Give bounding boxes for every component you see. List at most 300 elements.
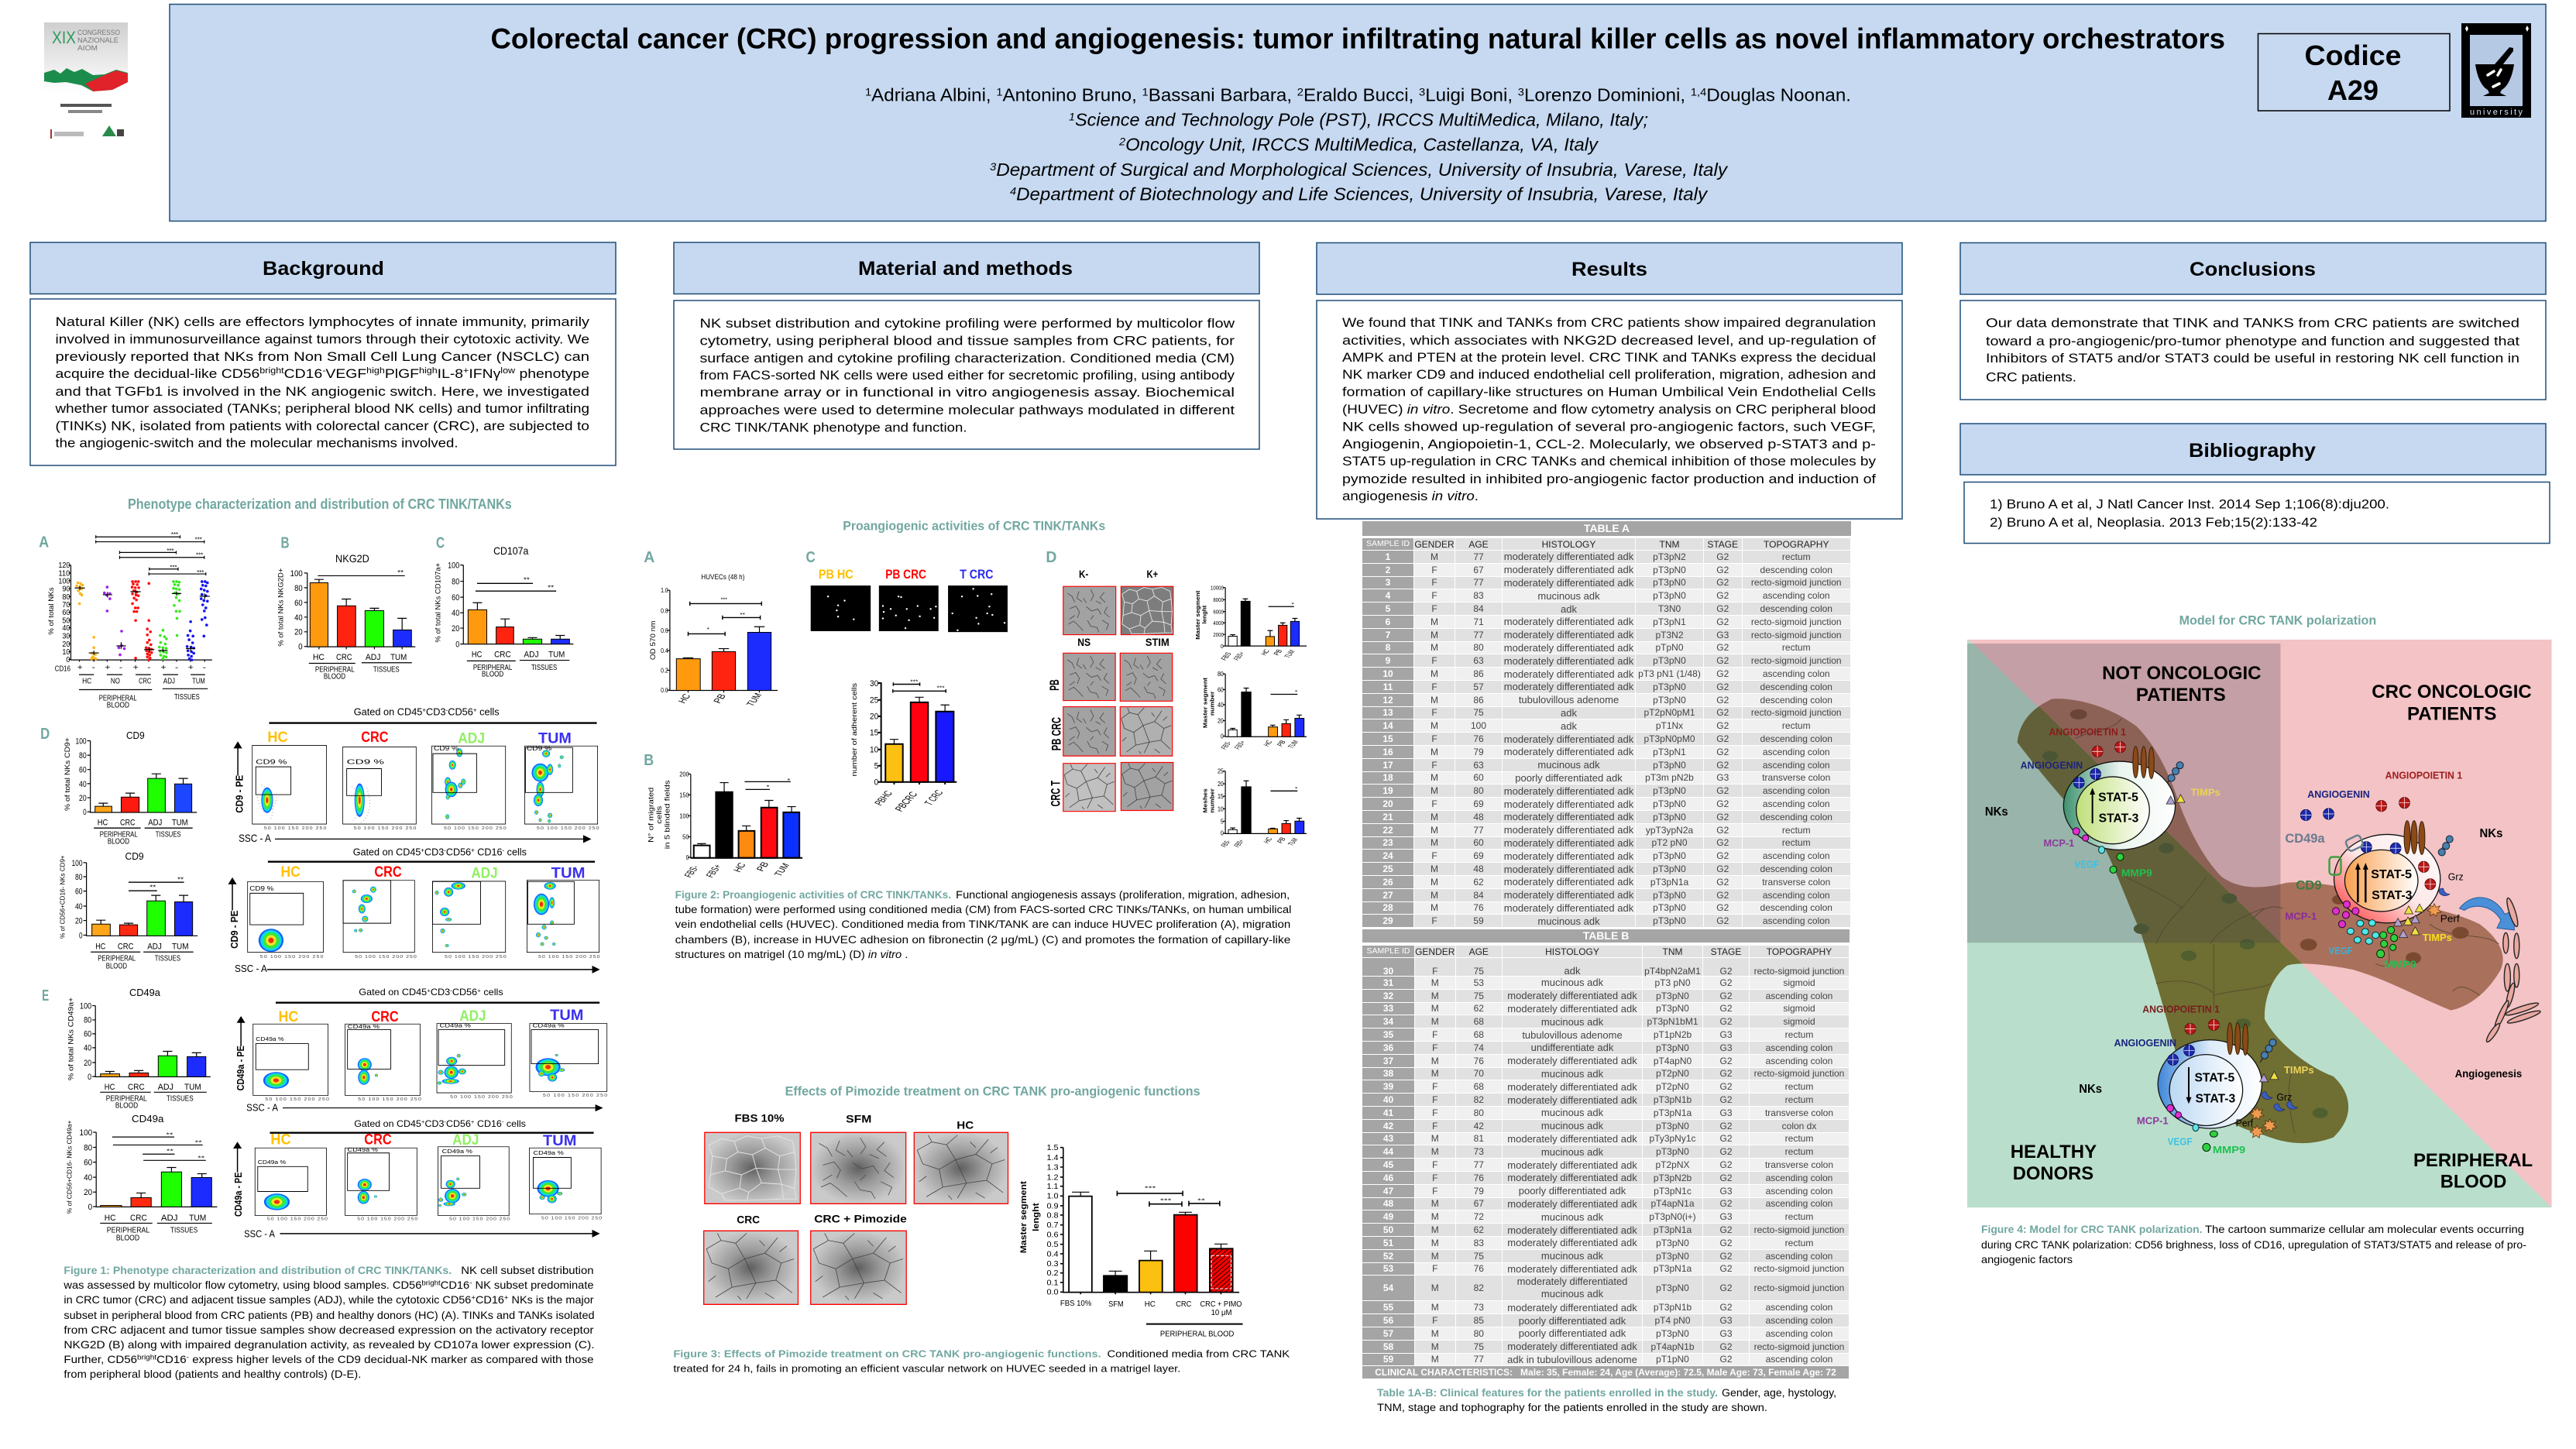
chart: master segment length with pimozide: *** <box>1160 1198 1172 1204</box>
panel D chart: meshes number: PB <box>1275 836 1287 844</box>
table B: pT3pN0 <box>1656 991 1689 1001</box>
table B: sigmoid <box>1783 1003 1815 1014</box>
table A: M <box>1431 877 1438 888</box>
chart A: scatter of NK subsets: 70 <box>62 601 70 609</box>
table B: rectum <box>1785 1081 1813 1092</box>
flow cytometry row: CD9 gated on CD56+: 50 100 150 200 250 <box>264 826 327 831</box>
text block: Conclusions: Inhibitors of STAT5 and/or STAT3 could be useful in restoring NK cell function in <box>1986 351 2519 366</box>
text block: Background: high <box>419 366 438 376</box>
chart B: migrated cells: in 5 blinded fields <box>663 780 671 849</box>
table B: F <box>1432 1159 1437 1170</box>
chart E: CD49a CD56+CD16- NKs: PERIPHERAL <box>107 1226 150 1234</box>
table A: ypT3ypN2a <box>1646 825 1693 836</box>
tissue shape <box>2018 699 2503 1143</box>
not-oncologic overlay <box>1967 644 2280 943</box>
flow cytometry row: CD9 gated on CD56+: CRC <box>361 729 389 745</box>
table B: M <box>1431 1251 1439 1262</box>
quadrant labels: PATIENTS <box>2136 685 2226 706</box>
table A: pT3pN2 <box>1653 551 1686 562</box>
panel D chart: master segment number: 60 <box>1218 686 1224 694</box>
table A: 20 <box>1382 798 1393 809</box>
panel D chart: master segment length: 10000 <box>1211 585 1224 592</box>
chart: master segment length with pimozide: 0.7 <box>1046 1221 1059 1229</box>
NK cell: healthy donors: MCP-1 <box>2137 1115 2169 1126</box>
text block: Background: bright <box>259 366 284 376</box>
table A: G2 <box>1716 642 1729 653</box>
chart A: scatter of NK subsets: *** <box>197 569 204 576</box>
chart D: CD9 total NKs: 100 <box>76 737 87 746</box>
figure 4 caption <box>1981 1223 2526 1265</box>
flow cytometry row: CD9 gated on CD56+: 50 100 150 200 250 <box>537 826 599 831</box>
table B: 54 <box>1383 1282 1393 1293</box>
table A: M <box>1431 616 1438 627</box>
table A: ascending colon <box>1763 785 1830 796</box>
table B: pT3pN1bM1 <box>1647 1016 1698 1027</box>
figure 1 caption: + <box>504 1294 509 1302</box>
figure 2: proangiogenic activities <box>644 519 1307 960</box>
table A: G3 <box>1716 772 1729 783</box>
NK cell: healthy donors: ANGIOGENIN <box>2114 1038 2176 1049</box>
table B: HISTOLOGY <box>1545 946 1599 957</box>
table B: 36 <box>1383 1042 1393 1053</box>
chart: master segment length with pimozide: PERIPHERAL BLOOD <box>1160 1329 1234 1338</box>
table A: moderately differentiated adk <box>1504 824 1633 836</box>
table A: F <box>1431 590 1437 601</box>
table B: 70 <box>1474 1068 1484 1079</box>
table A: G2 <box>1716 798 1729 809</box>
flow cytometry row: CD49a gated on CD56+: CD49a % <box>348 1023 380 1030</box>
table B: G2 <box>1719 1238 1732 1248</box>
table A: G2 <box>1716 760 1729 771</box>
table A: 80 <box>1473 785 1484 796</box>
text block: Results: pymozide resulted in inhibited pro-angiogenic factor production and induction of <box>1342 472 1876 486</box>
table A: F <box>1431 565 1437 575</box>
chart D: CD9 total NKs <box>40 725 197 846</box>
table A: descending colon <box>1760 695 1832 706</box>
conference logo: XIX <box>52 28 76 47</box>
table B: G3 <box>1719 1211 1732 1222</box>
chart A: scatter of NK subsets: 0 <box>66 656 70 664</box>
table B: pT3pN1a <box>1654 1263 1692 1274</box>
table B: pT1pN0 <box>1656 1354 1689 1365</box>
table A: M <box>1431 720 1438 731</box>
table A: mucinous adk <box>1537 915 1600 927</box>
panel D chart: master segment length: * <box>1291 602 1294 607</box>
table A: 86 <box>1473 668 1484 679</box>
table B: ascending colon <box>1766 1186 1832 1197</box>
flow cytometry row: CD9 gated on CD56+: CD3 <box>426 707 446 718</box>
flow cytometry row: CD9 gated on CD56+: CD9 % <box>527 745 551 752</box>
text block: Background: phenotype <box>515 366 589 381</box>
table B: 85 <box>1474 1315 1484 1326</box>
flow cytometry row: CD9 gated on CD16-: TUM <box>551 864 585 881</box>
figure 4 title: Model for CRC TANK polarization <box>2179 613 2376 628</box>
flow cytometry row: CD49a gated on CD16-: TUM <box>543 1132 576 1149</box>
flow cytometry row: CD49a gated on CD56+: SSC - A <box>246 1102 279 1114</box>
chart: master segment length with pimozide <box>1018 1143 1243 1338</box>
flow cytometry row: CD49a gated on CD56+: CD49a - PE <box>236 1046 247 1090</box>
panel D chart: master segment length: 0 <box>1221 643 1224 650</box>
table B: rectum <box>1785 1094 1813 1105</box>
table A: pT3pN0 <box>1653 695 1686 706</box>
heading: Bibliography: Bibliography <box>2189 440 2316 462</box>
panel D chart: master segment length: 4000 <box>1213 620 1224 627</box>
conference logo: NAZIONALE <box>77 36 118 44</box>
chart A: scatter of NK subsets: + <box>77 664 83 672</box>
figure 1 lower: CD49a charts and caption <box>42 963 608 1381</box>
chart D: CD9 CD56+CD16- NKs: TUM <box>172 941 189 951</box>
panel D chart: master segment number: 80 <box>1218 671 1224 678</box>
table A: pT2pN0pM1 <box>1643 707 1695 718</box>
chart A: scatter of NK subsets: *** <box>167 548 174 555</box>
table A: moderately differentiated adk <box>1504 876 1633 888</box>
chart E: CD49a total NKs: BLOOD <box>115 1101 138 1110</box>
table A: G2 <box>1716 915 1729 926</box>
table A: G2 <box>1716 812 1729 822</box>
table A: 76 <box>1473 902 1484 913</box>
table A: G2 <box>1716 747 1729 757</box>
table B title <box>1362 929 1850 943</box>
table B: moderately differentiated adk <box>1507 1081 1637 1093</box>
flow cytometry row: CD9 gated on CD16-: + <box>421 846 424 853</box>
table A: 62 <box>1473 877 1484 888</box>
table B: M <box>1431 1238 1439 1248</box>
chart C: CD107a bars: PERIPHERAL <box>473 664 512 671</box>
table B: pT3pN0 <box>1656 1042 1689 1053</box>
flow cytometry row: CD9 gated on CD16-: + <box>471 846 475 853</box>
heading: Conclusions <box>1960 243 2546 294</box>
figure 4 caption: The cartoon summarize cellular am molecular events occurring <box>2205 1223 2524 1235</box>
table A: F <box>1431 733 1437 744</box>
NK cell: healthy donors: ANGIOPOIETIN 1 <box>2142 1004 2220 1015</box>
figure 2 caption: structures on matrigel (10 mg/mL) (D) in vitro . <box>675 948 908 960</box>
table B: moderately differentiated adk <box>1507 1263 1637 1275</box>
NK cell: healthy donors: VEGF <box>2168 1136 2193 1148</box>
chart A: HUVEC proliferation: 0.2 <box>661 667 668 675</box>
panel C: adhesion images and bars <box>806 548 1008 813</box>
text block: methods <box>674 300 1259 449</box>
chart: master segment length with pimozide: lenght <box>1031 1203 1040 1231</box>
flow cytometry row: CD49a gated on CD56+: CD49a % <box>256 1035 284 1042</box>
chart E: CD49a CD56+CD16- NKs: ** <box>167 1148 174 1154</box>
table B: moderately differentiated adk <box>1507 1133 1637 1145</box>
chart E: CD49a CD56+CD16- NKs: CRC <box>130 1213 147 1223</box>
chart A: HUVEC proliferation: OD 570 nm <box>649 621 657 660</box>
text block: Conclusions: toward a pro-angiogenic/pro-tumor phenotype and function and suggested that <box>1986 334 2519 349</box>
chart: master segment length with pimozide: 0.8 <box>1046 1210 1059 1219</box>
chart B: migrated cells: HC <box>732 862 748 874</box>
table A: 8 <box>1386 642 1390 653</box>
table A: 77 <box>1473 577 1484 588</box>
chart B: NKG2D bars: BLOOD <box>324 673 345 681</box>
table A: G2 <box>1716 565 1729 575</box>
NK cell: not oncologic: NKs <box>1985 805 2008 819</box>
table A: F <box>1431 760 1437 771</box>
table A: 29 <box>1382 915 1393 926</box>
table B: pT4 pN0 <box>1654 1315 1691 1326</box>
table A: 76 <box>1473 733 1484 744</box>
table B: 49 <box>1383 1211 1393 1222</box>
table B: 58 <box>1383 1341 1393 1352</box>
table B: ascending colon <box>1766 1173 1832 1183</box>
table A: M <box>1431 551 1438 562</box>
table A: 84 <box>1473 603 1484 614</box>
text block: Background: VEGF <box>325 366 366 381</box>
panel D chart: master segment number: TUM <box>1286 739 1300 750</box>
NK cell: CRC oncologic: Perf <box>2440 913 2460 925</box>
table B: 33 <box>1383 1003 1393 1014</box>
table B: rectum <box>1785 1238 1813 1248</box>
panel D chart: meshes number: Meshes <box>1203 788 1209 813</box>
chart D: CD9 total NKs: CD9 <box>126 731 145 742</box>
authors: 1 <box>996 85 1003 98</box>
table A: adk <box>1561 720 1577 732</box>
panel D chart: meshes number: HC <box>1262 836 1274 844</box>
chart A: HUVEC proliferation: 0.4 <box>661 647 668 654</box>
table B: poorly differentiated adk <box>1519 1185 1626 1197</box>
text block: methods: CRC TINK/TANK phenotype and function. <box>700 420 967 435</box>
quadrant labels: HEALTHY <box>2011 1142 2097 1162</box>
table A: descending colon <box>1760 603 1832 614</box>
table A: moderately differentiated adk <box>1504 746 1633 757</box>
chart E: CD49a CD56+CD16- NKs: 20 <box>84 1187 92 1197</box>
table B: G2 <box>1719 991 1732 1001</box>
table A: 59 <box>1473 915 1484 926</box>
chart A: scatter of NK subsets: 30 <box>62 633 70 640</box>
flow cytometry row: CD9 gated on CD56+: + <box>422 706 426 713</box>
table B: mucinous adk <box>1541 1120 1603 1131</box>
code box: Codice <box>2305 39 2401 71</box>
conference logo <box>44 22 128 139</box>
chart: master segment length with pimozide: 0.4 <box>1046 1249 1059 1258</box>
chart A: scatter of NK subsets: ADJ <box>163 678 175 685</box>
table A: M <box>1431 695 1438 706</box>
chart: master segment length with pimozide: FBS 10% <box>1060 1299 1091 1307</box>
chart D: CD9 CD56+CD16- NKs: TISSUES <box>155 955 180 963</box>
text block: references: 1) Bruno A et al, J Natl Cancer Inst. 2014 Sep 1;106(8):dju200. <box>1990 497 2389 511</box>
table A: moderately differentiated adk <box>1504 551 1633 562</box>
chart C: CD107a bars: BLOOD <box>482 671 503 678</box>
table A: G2 <box>1716 655 1729 666</box>
text block: Background: Natural Killer (NK) cells are effectors lymphocytes of innate immunity, primarily <box>56 314 590 329</box>
panel: Results <box>1317 243 1902 519</box>
table A: poorly differentiated adk <box>1515 772 1623 784</box>
panel D chart: master segment number: FBS+ <box>1232 740 1247 750</box>
text block: Results <box>1317 300 1902 519</box>
chart D: CD9 CD56+CD16- NKs: ** <box>149 884 156 891</box>
chart E: CD49a CD56+CD16- NKs: 60 <box>84 1157 92 1167</box>
table B: G3 <box>1719 1042 1732 1053</box>
table A: ascending colon <box>1763 760 1830 771</box>
text block: Results: AMPK and PTEN at the protein level. CRC TINK and TANKs express the decidual <box>1342 350 1876 365</box>
chart D: CD9 total NKs: D <box>40 725 50 743</box>
table A: moderately differentiated adk <box>1504 811 1633 822</box>
table B: moderately differentiated adk <box>1507 1172 1637 1183</box>
text block: methods: membrane array or in functional in vitro angiogenesis assay. Biochemical <box>700 385 1235 400</box>
table B: M <box>1431 1003 1439 1014</box>
affiliations: 4 <box>1010 184 1016 197</box>
chart A: HUVEC proliferation: TUM <box>745 692 764 708</box>
table B: transverse colon <box>1765 1107 1833 1118</box>
chart E: CD49a total NKs: 20 <box>84 1058 91 1067</box>
quadrant labels: BLOOD <box>2440 1171 2506 1193</box>
authors: 1 <box>1142 85 1149 98</box>
chart B: NKG2D bars: 60 <box>294 598 303 607</box>
panel D chart: master segment length: Master segment <box>1195 591 1201 640</box>
affiliations: Department of Surgical and Morphological Sciences, University of Insubria, Varese, Italy <box>996 160 1729 180</box>
flow cytometry row: CD49a gated on CD56+: 50 100 150 200 250 <box>358 1097 421 1102</box>
chart B: migrated cells: TUM <box>773 862 792 877</box>
arrow and endothelial cells: angiogenesis: Angiogenesis <box>2455 1068 2522 1080</box>
table A-B caption: Table 1A-B: Clinical features for the patients enrolled in the study. <box>1377 1387 1718 1399</box>
table A-B caption <box>1377 1387 1836 1413</box>
table A: 21 <box>1382 812 1393 822</box>
flow cytometry row: CD9 gated on CD16-: CD16 <box>475 847 503 858</box>
table B: G2 <box>1719 1016 1732 1027</box>
table A: 63 <box>1473 760 1484 771</box>
text block: methods: surface antigen and cytokine profiling characterization. Conditioned media (CM) <box>700 351 1235 366</box>
SSC-A axis label <box>235 963 600 974</box>
table A: pT3N2 <box>1655 630 1684 640</box>
figure 1 upper: phenotype charts <box>39 496 600 970</box>
table A: 67 <box>1473 565 1484 575</box>
table B: 53 <box>1383 1263 1393 1274</box>
NK cell: healthy donors: Perf <box>2236 1117 2253 1129</box>
table B: GENDER <box>1415 946 1455 957</box>
table B: F <box>1432 1029 1437 1040</box>
chart A: scatter of NK subsets: *** <box>170 565 177 571</box>
flow cytometry row: CD9 gated on CD16-: Gated on CD45 <box>353 847 440 858</box>
text block: Background: and that TGFb1 is involved in the NK angiogenic switch. Here, we investigated <box>56 384 589 399</box>
table B: tubulovillous adenome <box>1522 1029 1623 1041</box>
table B: F <box>1432 1121 1437 1131</box>
flow cytometry row: CD49a gated on CD16-: CD56 <box>446 1119 471 1129</box>
table A: recto-sigmoid junction <box>1751 577 1842 588</box>
figure 3 caption: Conditioned media from CRC TANK <box>1107 1348 1290 1360</box>
panel D chart: meshes number: 10 <box>1218 805 1224 813</box>
chart C: CD107a bars: 40 <box>452 609 459 618</box>
table A-B caption: TNM, stage and tophography for the patients enrolled in the study are shown. <box>1377 1402 1767 1413</box>
text block: Results: Angiogenin, Angiopoietin-1, CCL-2. Molecularly, we observed p-STAT3 and p- <box>1342 437 1876 452</box>
table B: 31 <box>1383 977 1393 988</box>
flow cytometry row: CD9 gated on CD16-: CD9 - PE <box>230 910 240 949</box>
panel D chart: meshes number: * <box>1295 786 1297 791</box>
panel C: adhesion images and bars: C <box>806 548 816 566</box>
title: Colorectal cancer (CRC) progression and angiogenesis: tumor infiltrating natural killer cells as novel inflammatory orchestrators <box>491 23 2225 54</box>
table B: moderately differentiated adk <box>1507 1341 1637 1352</box>
flow cytometry row: CD49a gated on CD16-: cells <box>503 1119 526 1129</box>
flow cytometry row: CD9 gated on CD56+: CD9 % <box>347 759 384 765</box>
table A: 48 <box>1473 864 1484 874</box>
table B: 45 <box>1383 1159 1393 1170</box>
chart: master segment length with pimozide: 1.1 <box>1046 1182 1059 1190</box>
flow cytometry row: CD49a gated on CD16-: HC <box>270 1131 291 1148</box>
table B: pT4apN1a <box>1650 1198 1695 1209</box>
chart B: NKG2D bars: ADJ <box>366 651 380 661</box>
NK cell: not oncologic: ANGIOPOIETIN 1 <box>2049 726 2126 737</box>
table B: G2 <box>1719 1282 1732 1293</box>
table A: moderately differentiated adk <box>1504 902 1633 914</box>
table B: 68 <box>1474 1081 1484 1092</box>
chart A: scatter of NK subsets: - <box>175 664 178 672</box>
chart B: NKG2D bars: NKG2D <box>335 554 369 565</box>
chart E: CD49a total NKs: E <box>42 987 49 1004</box>
table B: pT4bpN2aM1 <box>1644 966 1701 977</box>
table B: 75 <box>1474 1341 1484 1352</box>
arrow and endothelial cells: angiogenesis <box>2455 897 2541 1080</box>
table B: pT3pN0 <box>1656 1146 1689 1157</box>
chart: master segment length with pimozide: CRC + PIMO <box>1200 1300 1242 1308</box>
flow cytometry row: CD9 gated on CD16-: CD3 <box>424 847 444 858</box>
flow cytometry row: CD9 gated on CD16-: cells <box>504 847 527 858</box>
panel D chart: meshes number: 25 <box>1218 768 1224 775</box>
figure 1 title: Phenotype characterization and distribution of CRC TINK/TANKs <box>128 496 512 512</box>
panel: Material and methods <box>674 242 1259 449</box>
flow cytometry row: CD9 gated on CD16-: - <box>503 846 504 853</box>
chart: master segment length with pimozide: 0.5 <box>1046 1240 1059 1248</box>
table A: transverse colon <box>1762 772 1830 783</box>
micrographs: HC <box>957 1119 974 1131</box>
table B: pT2pN0 <box>1656 1068 1689 1079</box>
table B: 81 <box>1474 1133 1484 1144</box>
flow cytometry row: CD49a gated on CD56+: TUM <box>550 1007 583 1023</box>
table B title: TABLE B <box>1583 929 1629 942</box>
table A: 63 <box>1473 655 1484 666</box>
conference logo: AIOM <box>77 44 98 52</box>
flow cytometry row: CD9 gated on CD56+: - <box>446 706 448 713</box>
figure 1 caption: CD16 <box>156 1354 187 1366</box>
table B: TNM <box>1662 946 1682 957</box>
table A: pT3pN0 <box>1653 760 1686 771</box>
affiliations <box>990 110 1729 204</box>
panel D chart: master segment number: Master segment <box>1203 678 1209 728</box>
table A: moderately differentiated adk <box>1504 668 1633 680</box>
chart C: CD107a bars: 80 <box>452 577 459 586</box>
chart A: scatter of NK subsets: TISSUES <box>174 693 200 701</box>
table A: rectum <box>1782 825 1811 836</box>
affiliations: Department of Biotechnology and Life Sciences, University of Insubria, Varese, Italy <box>1016 184 1709 204</box>
chart C: CD107a bars: 20 <box>452 623 459 634</box>
table B: G2 <box>1719 1251 1732 1262</box>
NK cell: CRC oncologic: ANGIOPOIETIN 1 <box>2385 770 2462 781</box>
flow cytometry row: CD49a gated on CD56+: cells <box>481 987 503 998</box>
flow cytometry row: CD9 gated on CD56+: CD9 % <box>256 759 287 765</box>
table A: recto-sigmoid junction <box>1751 616 1842 627</box>
table A: ascending colon <box>1763 850 1830 861</box>
figure 1 caption: from peripheral blood (patients and healthy controls) (D-E). <box>64 1368 361 1381</box>
table B: M <box>1431 1146 1439 1157</box>
chart: master segment length with pimozide: 0.6 <box>1046 1230 1059 1238</box>
text block: Background: - <box>322 366 326 376</box>
chart: master segment length with pimozide: 1.2 <box>1046 1173 1059 1181</box>
table A: M <box>1431 864 1438 874</box>
flow cytometry row: CD9 gated on CD56+: cells <box>477 707 500 718</box>
chart A: scatter of NK subsets: TUM <box>192 678 205 685</box>
chart A: scatter of NK subsets: - <box>147 664 151 672</box>
table A: pT3pN0 <box>1653 798 1686 809</box>
chart B: NKG2D bars: HC <box>313 651 325 661</box>
NK cell: healthy donors: MMP9 <box>2213 1145 2245 1155</box>
table A: F <box>1431 915 1437 926</box>
chart A: scatter of NK subsets: BLOOD <box>107 702 129 709</box>
table B: 83 <box>1474 1238 1484 1248</box>
code box <box>2258 34 2450 111</box>
table A: 4 <box>1386 590 1390 601</box>
table B: F <box>1432 1042 1437 1053</box>
table B: M <box>1431 1328 1439 1339</box>
NK cell: healthy donors <box>2079 1004 2314 1155</box>
table B: 62 <box>1474 1224 1484 1235</box>
